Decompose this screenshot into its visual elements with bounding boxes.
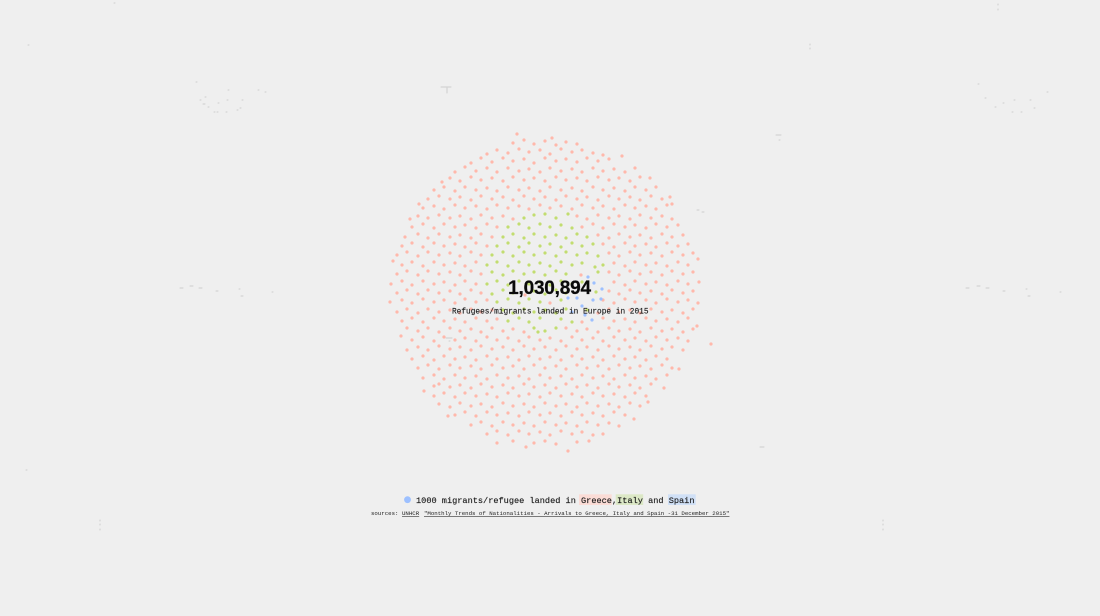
dots: Italy arrivals	[487, 214, 603, 332]
sources: sources:	[371, 510, 398, 517]
dots: Greece arrivals	[390, 134, 711, 451]
subtitle: Refugees/migrants landed in Europe in 2015	[452, 308, 649, 316]
dots: Spain arrivals	[568, 277, 602, 320]
sources: "Monthly Trends of Nationalities - Arrivals to Greece, Italy and Spain -31 December 2015"	[424, 510, 729, 517]
highlight: Spain	[668, 494, 696, 505]
total figure: 1,030,894	[508, 278, 591, 299]
dot chart: 1 dot per 1000 arrivals	[390, 134, 711, 451]
sources: UNHCR	[402, 510, 420, 517]
legend text: 1000 migrants/refugee landed in Greece,Italy and Spain	[416, 496, 694, 506]
highlight: Greece	[579, 494, 612, 505]
legend	[404, 494, 696, 506]
legend dot	[404, 496, 411, 503]
highlight: Italy	[616, 494, 643, 505]
